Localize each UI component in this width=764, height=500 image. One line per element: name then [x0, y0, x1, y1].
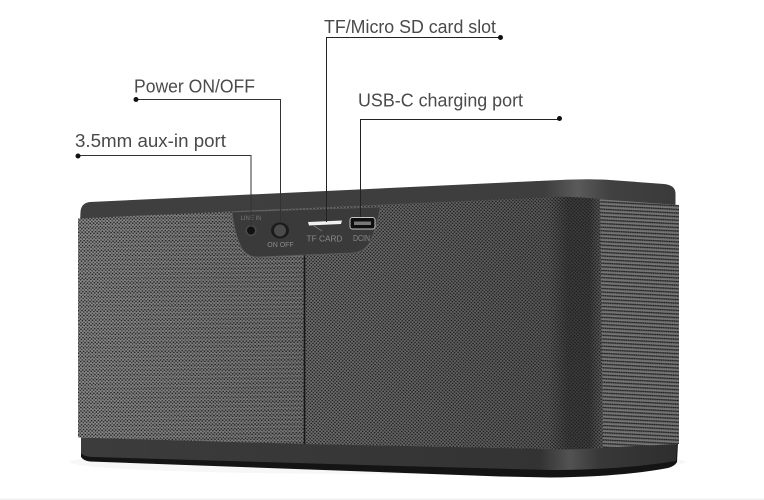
callout: TF/Micro SD card slot: TF/Micro SD card slot	[324, 17, 496, 37]
power switch: ON OFF	[267, 242, 294, 249]
power switch	[267, 222, 294, 249]
ground shadow	[70, 450, 686, 474]
callout: Power ON/OFF	[134, 76, 280, 222]
callout: 3.5mm aux-in port	[75, 131, 251, 226]
speaker	[70, 179, 686, 478]
side grille	[596, 199, 679, 448]
top cap	[80, 179, 676, 222]
callout: Power ON/OFF: Power ON/OFF	[134, 76, 255, 96]
panel plate	[232, 207, 380, 257]
page bottom rule	[0, 498, 764, 500]
front grille left panel and main panel	[78, 197, 552, 449]
centre seam	[304, 255, 306, 444]
callout: USB-C charging port: USB-C charging port	[358, 90, 523, 110]
USB-C port: DCIN	[353, 234, 370, 243]
aux jack	[240, 216, 262, 236]
callout: 3.5mm aux-in port: 3.5mm aux-in port	[75, 131, 226, 151]
TF card slot: TF CARD	[306, 234, 343, 244]
callout: TF/Micro SD card slot	[324, 17, 503, 222]
rounded corner grille	[549, 197, 603, 449]
aux jack: LINE IN	[240, 216, 262, 222]
port panel	[232, 207, 380, 257]
speaker base	[81, 437, 678, 478]
USB-C port	[350, 218, 375, 243]
callout: USB-C charging port	[358, 90, 562, 217]
TF card slot	[306, 220, 343, 244]
